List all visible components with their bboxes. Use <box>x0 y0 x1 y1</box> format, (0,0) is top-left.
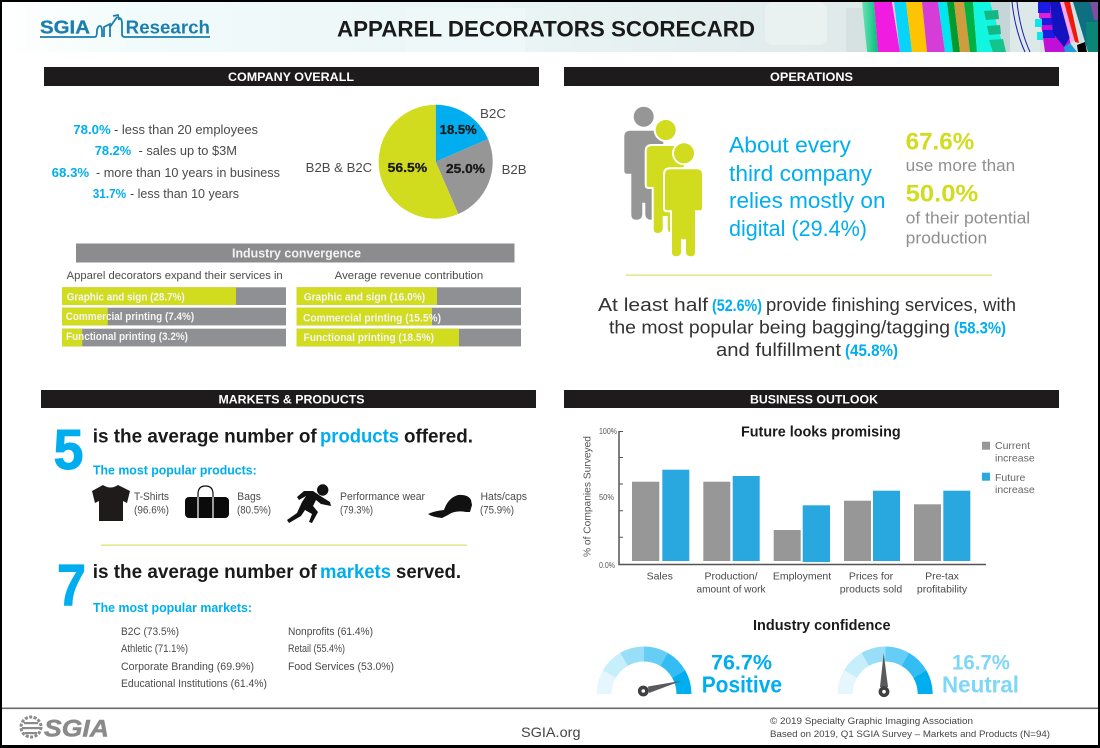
label: t-shirts: (96.6%) <box>134 504 169 516</box>
label: hats and caps: (75.9%) <box>480 504 514 516</box>
pie chart: business model: 25.0% <box>446 161 485 176</box>
label: performance wear <box>340 491 425 516</box>
markets sentence <box>93 562 461 583</box>
pie chart: business model: 56.5% <box>388 160 428 175</box>
products sentence <box>93 426 473 447</box>
heading: company overall: COMPANY OVERALL <box>228 70 354 84</box>
footer logo: SGIA: SGIA <box>44 716 109 742</box>
heading: business outlook <box>564 390 1059 408</box>
bar chart: current vs future increase: profitability <box>917 584 968 596</box>
markets sentence: is the average number of <box>93 562 317 583</box>
markets sentence: served. <box>396 562 461 583</box>
company stats list: 78.2% <box>95 143 132 158</box>
bar list: expand services <box>62 270 286 346</box>
chart legend <box>982 440 1035 496</box>
subheading: popular markets: The most popular markets: <box>93 600 252 615</box>
label: hats and caps: Hats/caps <box>480 491 527 503</box>
company stats list: - sales up to $3M <box>138 143 237 158</box>
heading: markets and products <box>41 390 536 408</box>
bar list: revenue contribution: Functional printing (18.5%) <box>304 332 434 344</box>
list: popular markets: Corporate Branding (69.9%) <box>121 661 254 673</box>
text: finishing services: At least half <box>598 294 709 315</box>
bar chart: current vs future increase: % of Companies Surveyed <box>582 436 594 557</box>
bar chart: current vs future increase: Prices for <box>849 570 894 582</box>
footer credits: Based on 2019, Q1 SGIA Survey – Markets and Products (N=94) <box>770 729 1050 740</box>
gauge: positive <box>596 646 692 695</box>
text: finishing services: (45.8%) <box>845 342 898 360</box>
bar list: expand services: Commercial printing (7.4%) <box>66 311 194 323</box>
bar list: expand services: Apparel decorators expand their services in <box>67 270 283 282</box>
chart legend: Current <box>995 440 1030 452</box>
pie chart: business model: B2B & B2C <box>306 160 372 175</box>
chart legend: increase <box>995 484 1035 496</box>
list: popular markets: Retail (55.4%) <box>288 643 345 655</box>
text: production capacity: 50.0% <box>906 181 978 208</box>
icon: cap <box>428 495 472 518</box>
icon: three people <box>624 107 703 257</box>
sub-panel: industry convergence <box>62 244 521 346</box>
bar chart: current vs future increase: 50% <box>599 493 614 502</box>
logo: SGIA Research: SGIA <box>40 18 90 38</box>
bar chart: current vs future increase <box>582 427 986 596</box>
products sentence: offered. <box>404 426 473 447</box>
label: hats and caps <box>480 491 527 516</box>
list: popular markets: Nonprofits (61.4%) <box>288 626 373 638</box>
icon: t-shirt <box>92 485 130 521</box>
bar chart: current vs future increase: products sold <box>840 584 902 596</box>
chart legend: increase <box>995 453 1035 465</box>
gauge: neutral <box>838 646 933 695</box>
company stats list: - less than 20 employees <box>114 122 258 137</box>
text: digital reliance <box>729 132 886 241</box>
gauge value: neutral <box>942 651 1019 698</box>
text: digital reliance: digital (29.4%) <box>729 216 867 241</box>
gauge value: positive: 76.7% <box>711 651 772 674</box>
pie chart: business model: 18.5% <box>440 122 477 137</box>
panel: company overall <box>44 67 539 346</box>
label: bags: (80.5%) <box>237 504 271 516</box>
gauge value: neutral: Neutral <box>942 672 1019 698</box>
list: popular markets: Educational Institutions (61.4%) <box>121 678 267 690</box>
label: bags: Bags <box>237 491 261 503</box>
company stats list: - more than 10 years in business <box>96 165 280 180</box>
bar chart: current vs future increase: Production/ <box>704 570 758 582</box>
bar list: expand services: Graphic and sign (28.7%) <box>67 292 185 304</box>
heading: business outlook: BUSINESS OUTLOOK <box>750 392 878 406</box>
pie chart: business model: B2B <box>502 162 527 177</box>
bar list: revenue contribution: Average revenue contribution <box>335 270 483 282</box>
bar list: revenue contribution: Graphic and sign (16.0%) <box>304 292 426 304</box>
heading: industry confidence: Industry confidence <box>753 618 890 634</box>
company stats list: - less than 10 years <box>130 186 239 201</box>
text: finishing services <box>598 294 1016 360</box>
header band <box>2 2 1098 52</box>
subheading: popular products: The most popular products: <box>93 462 257 477</box>
text: production capacity: production <box>906 228 987 248</box>
icon: bag <box>185 486 229 518</box>
panel: operations <box>564 67 1059 360</box>
pie chart: business model <box>306 105 527 219</box>
footer credits: © 2019 Specialty Graphic Imaging Association <box>770 716 973 727</box>
bar chart: current vs future increase: 100% <box>599 427 617 436</box>
footer url: SGIA.org <box>521 724 580 740</box>
text: digital reliance: About every <box>729 132 852 158</box>
logo: SGIA Research: Research <box>126 18 210 38</box>
heading: operations: OPERATIONS <box>770 70 853 84</box>
list: popular markets: Food Services (53.0%) <box>288 661 394 673</box>
list: popular markets: B2C (73.5%) <box>121 626 179 638</box>
title: APPAREL DECORATORS SCORECARD <box>337 17 755 42</box>
footer logo: SGIA <box>21 716 109 742</box>
gauge value: neutral: 16.7% <box>952 651 1010 674</box>
list: popular markets <box>121 626 394 690</box>
label: t-shirts <box>134 491 169 516</box>
text: digital reliance: relies mostly on <box>729 188 886 213</box>
text: production capacity <box>906 128 1030 248</box>
bar chart: current vs future increase: Sales <box>647 570 673 582</box>
big number 5: 5 <box>54 418 84 482</box>
bar list: revenue contribution <box>296 270 521 346</box>
text: production capacity: of their potential <box>906 208 1030 227</box>
text: finishing services: the most popular being bagging/tagging <box>609 316 950 338</box>
footer <box>2 708 1098 742</box>
company stats list: 31.7% <box>93 186 127 201</box>
text: finishing services: (58.3%) <box>954 320 1006 338</box>
label: performance wear: (79.3%) <box>340 504 373 516</box>
products sentence: is the average number of <box>93 426 317 447</box>
bar chart: current vs future increase: 0.0% <box>599 561 615 570</box>
company stats list <box>52 122 280 201</box>
bar list: expand services: Functional printing (3.2%) <box>66 331 188 343</box>
chart legend: Future <box>995 472 1026 484</box>
heading: markets and products: MARKETS & PRODUCTS <box>218 392 364 406</box>
pie chart: business model: B2C <box>480 106 506 121</box>
markets sentence: markets <box>320 562 391 583</box>
heading: industry convergence <box>76 244 514 262</box>
logo: SGIA Research <box>40 15 210 38</box>
bar chart: current vs future increase: Pre-tax <box>925 570 960 582</box>
text: production capacity: use more than <box>906 156 1015 175</box>
company stats list: 68.3% <box>52 165 90 180</box>
chart title: Future looks promising <box>741 425 901 441</box>
label: bags <box>237 491 271 516</box>
gauge value: positive <box>702 651 782 698</box>
bar chart: current vs future increase: amount of work <box>696 584 766 596</box>
text: finishing services: provide finishing services, with <box>766 294 1016 315</box>
bar list: revenue contribution: Commercial printing (15.5%) <box>303 313 441 325</box>
gauge value: positive: Positive <box>702 672 782 698</box>
heading: operations <box>564 67 1059 86</box>
heading: industry convergence: Industry convergence <box>232 246 361 261</box>
text: finishing services: and fulfillment <box>716 339 841 360</box>
text: production capacity: 67.6% <box>906 128 974 155</box>
footer credits <box>770 716 1050 740</box>
big number 7: 7 <box>57 553 86 618</box>
heading: company overall <box>44 67 539 86</box>
text: digital reliance: third company <box>729 161 873 186</box>
bar chart: current vs future increase: Employment <box>773 570 831 582</box>
icon: runner <box>287 484 331 523</box>
label: performance wear: Performance wear <box>340 491 425 503</box>
products sentence: products <box>320 426 399 447</box>
text: finishing services: (52.6%) <box>712 297 762 315</box>
panel: markets and products <box>41 390 536 690</box>
panel: business outlook <box>564 390 1059 698</box>
company stats list: 78.0% <box>73 122 111 137</box>
label: t-shirts: T-Shirts <box>134 491 169 503</box>
list: popular markets: Athletic (71.1%) <box>121 643 188 655</box>
